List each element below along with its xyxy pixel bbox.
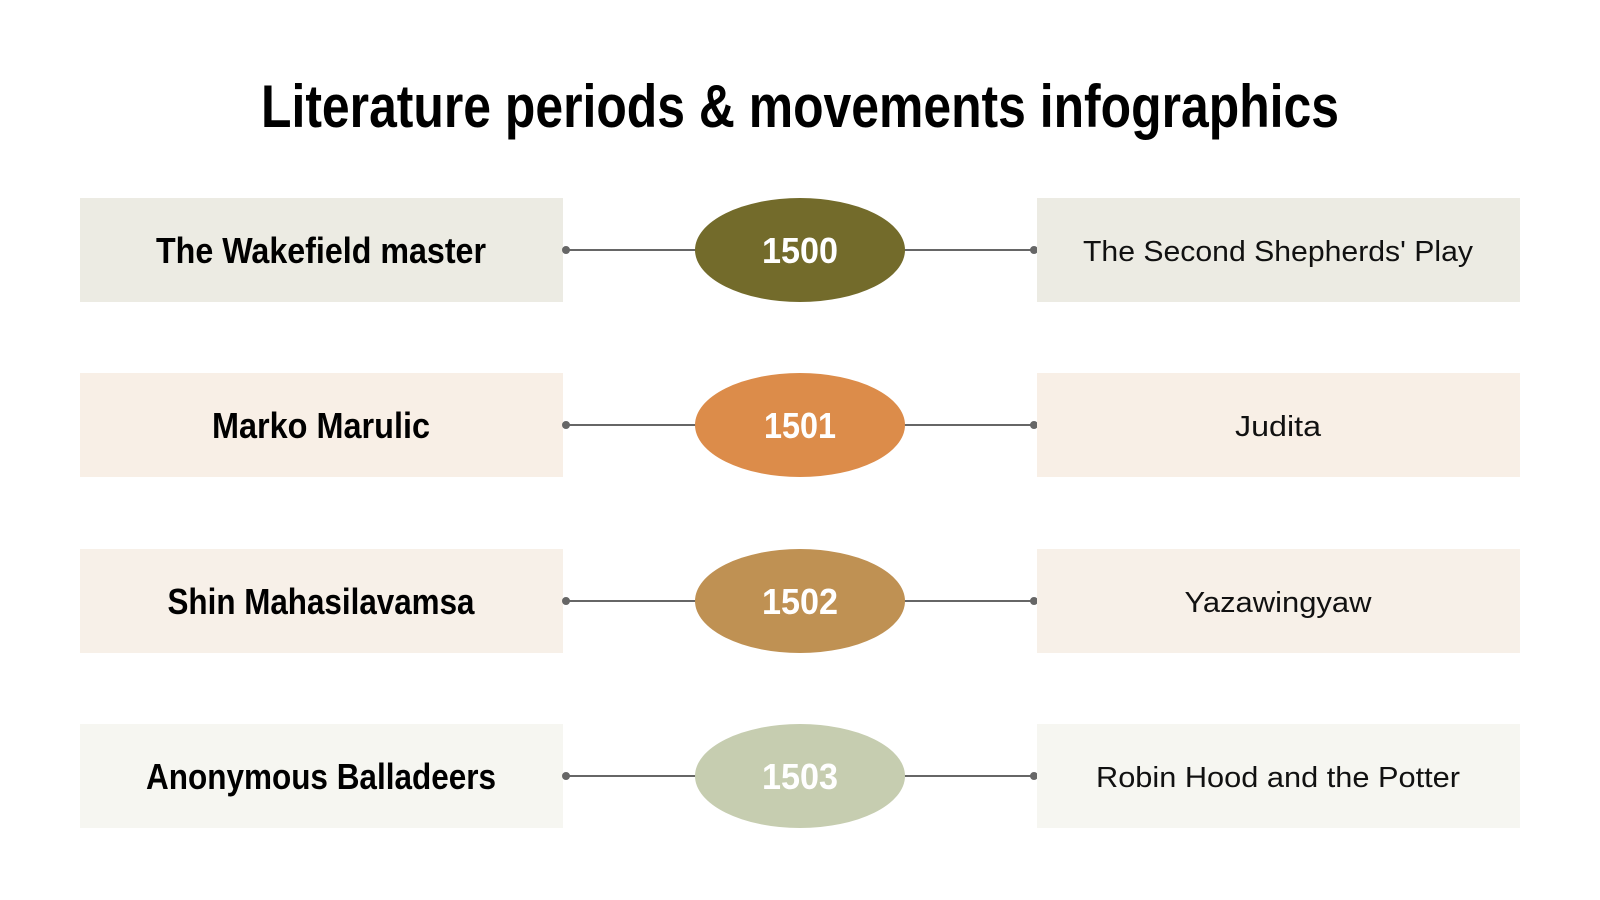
right box: work 2: Judita [1235, 411, 1322, 443]
left box: author 1: The Wakefield master [156, 230, 486, 271]
year ellipse 1503 [695, 724, 905, 828]
left box: author 4 [80, 724, 563, 828]
year ellipse 1503: 1503 [762, 756, 838, 797]
connector 1 [563, 247, 1037, 253]
year ellipse 1500 [695, 198, 905, 302]
left box: author 2 [80, 373, 563, 477]
year ellipse 1502 [695, 549, 905, 653]
left box: author 2: Marko Marulic [212, 405, 430, 446]
row 4 [80, 724, 1520, 828]
row 3 [80, 549, 1520, 653]
right box: work 4: Robin Hood and the Potter [1096, 762, 1460, 794]
right box: work 3: Yazawingyaw [1184, 587, 1373, 619]
left box: author 3: Shin Mahasilavamsa [168, 581, 475, 622]
right box: work 3 [1037, 549, 1520, 653]
year ellipse 1501: 1501 [764, 405, 836, 446]
right box: work 1 [1037, 198, 1520, 302]
row 2 [80, 373, 1520, 477]
row 1 [80, 198, 1520, 302]
left box: author 3 [80, 549, 563, 653]
year ellipse 1500: 1500 [762, 230, 838, 271]
connector 3 [563, 598, 1037, 604]
left box: author 4: Anonymous Balladeers [146, 756, 496, 797]
year ellipse 1502: 1502 [762, 581, 838, 622]
connector 4 [563, 773, 1037, 779]
right box: work 1: The Second Shepherds' Play [1083, 236, 1474, 268]
left box: author 1 [80, 198, 563, 302]
right box: work 2 [1037, 373, 1520, 477]
right box: work 4 [1037, 724, 1520, 828]
connector 2 [563, 422, 1037, 428]
title: Literature periods & movements infographics [261, 73, 1339, 140]
year ellipse 1501 [695, 373, 905, 477]
